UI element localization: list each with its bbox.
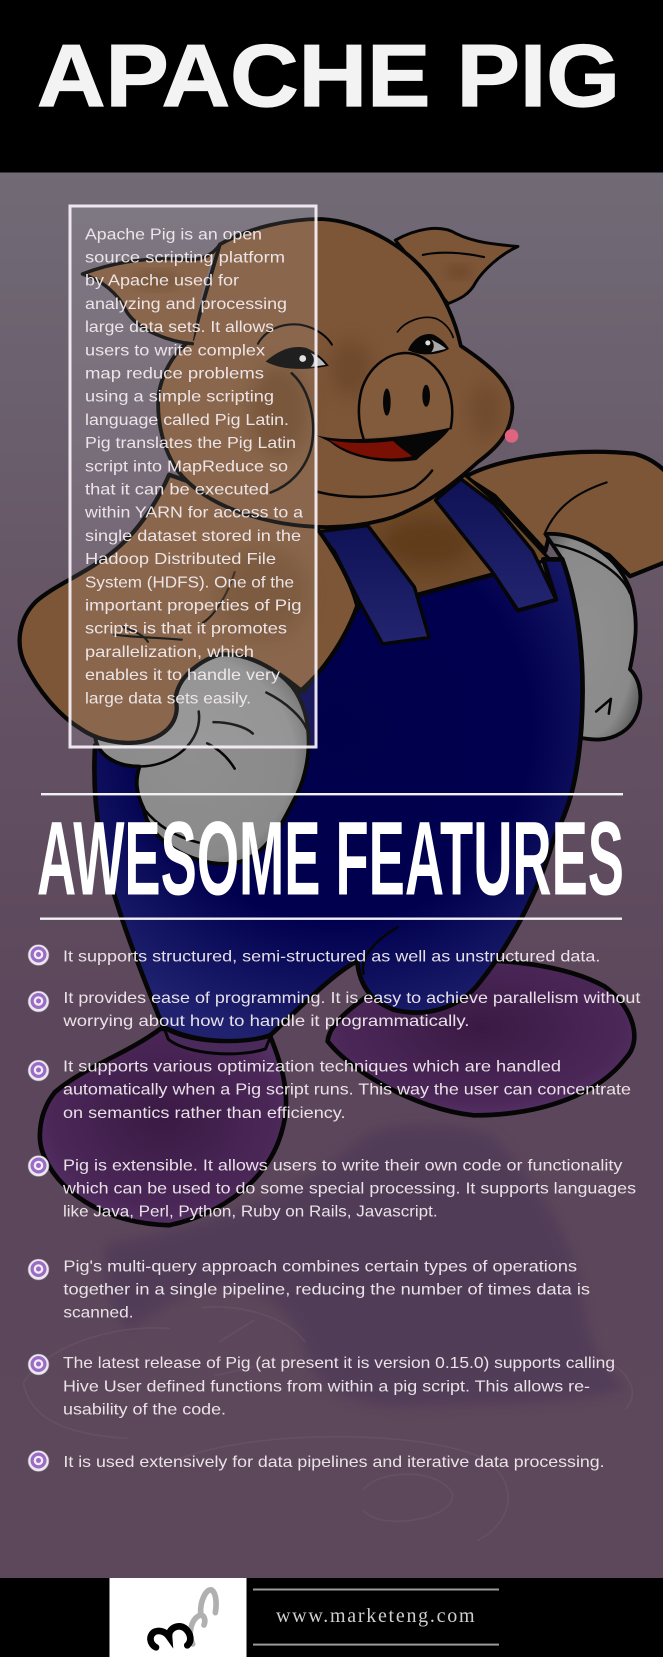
intro paragraph: Hadoop Distributed File xyxy=(85,551,276,568)
intro paragraph: analyzing and processing xyxy=(85,296,287,313)
intro paragraph: source scripting platform xyxy=(85,250,285,266)
feature 3 xyxy=(28,1058,631,1122)
feature 3: automatically when a Pig script runs. This way the user can concentrate xyxy=(63,1082,631,1099)
title: APACHE PIG xyxy=(37,26,620,125)
right strap xyxy=(435,479,556,610)
footer rules xyxy=(253,1588,499,1590)
intro paragraph: large data sets easily. xyxy=(85,690,251,707)
left strap xyxy=(317,526,429,644)
feature list xyxy=(28,944,641,1472)
left ear outline xyxy=(82,244,220,344)
pig head xyxy=(82,219,512,527)
left sock xyxy=(164,1028,271,1054)
left eye xyxy=(258,324,332,369)
intro box frame xyxy=(70,206,316,747)
feature 5: Pig's multi-query approach combines certain types of operations xyxy=(63,1259,577,1276)
intro paragraph: enables it to handle very xyxy=(85,667,280,684)
chest shading xyxy=(381,517,474,568)
footer band xyxy=(0,1578,663,1657)
left arm xyxy=(20,475,357,743)
right eye xyxy=(397,317,453,354)
website address: www.marketeng.com xyxy=(276,1605,475,1627)
mouth xyxy=(315,427,451,462)
intro paragraph: that it can be executed xyxy=(85,482,269,498)
icon: bullet xyxy=(28,944,49,966)
right ear xyxy=(395,228,518,304)
icon: bullet xyxy=(28,991,49,1012)
feature 4: which can be used to do some special processing. It supports languages xyxy=(62,1180,636,1197)
intro paragraph: using a simple scripting xyxy=(85,389,274,406)
intro paragraph: users to write complex xyxy=(85,342,265,359)
intro paragraph xyxy=(84,226,303,707)
feature 5: together in a single pipeline, reducing the number of times data is xyxy=(63,1282,590,1299)
left glove xyxy=(95,654,309,864)
icon: bullet xyxy=(28,1450,49,1472)
feature 3: on semantics rather than efficiency. xyxy=(63,1105,346,1122)
intro paragraph: large data sets. It allows xyxy=(85,319,274,336)
intro paragraph: scripts is that it promotes xyxy=(85,621,287,638)
icon: bullet xyxy=(28,1060,49,1081)
logo mark xyxy=(150,1590,216,1647)
intro paragraph: System (HDFS). One of the xyxy=(85,574,294,591)
left ear shading xyxy=(131,271,182,290)
feature 2: worrying about how to handle it programmatically. xyxy=(62,1013,469,1030)
feature 2: It provides ease of programming. It is easy to achieve parallelism without xyxy=(63,990,641,1007)
blue overalls xyxy=(94,559,583,1041)
intro paragraph: map reduce problems xyxy=(85,366,264,382)
intro paragraph: script into MapReduce so xyxy=(85,458,288,475)
intro paragraph: by Apache used for xyxy=(85,273,240,290)
snout xyxy=(359,353,452,439)
intro paragraph: Apache Pig is an open xyxy=(85,226,262,243)
cheek and chin lines xyxy=(271,373,432,497)
feature 7 xyxy=(28,1450,605,1472)
icon: bullet xyxy=(28,1259,49,1280)
right glove xyxy=(545,534,640,740)
feature 6: Hive User defined functions from within a pig script. This allows re- xyxy=(63,1378,590,1395)
icon: bullet xyxy=(28,1354,49,1375)
intro paragraph: language called Pig Latin. xyxy=(85,412,289,429)
feature 4: like Java, Perl, Python, Ruby on Rails, Javascript. xyxy=(63,1204,438,1220)
logo panel xyxy=(110,1578,246,1657)
feature 6: The latest release of Pig (at present it is version 0.15.0) supports calling xyxy=(63,1355,615,1372)
feature 7: It is used extensively for data pipelines and iterative data processing. xyxy=(63,1454,605,1471)
feature 4: Pig is extensible. It allows users to write their own code or functionality xyxy=(63,1157,622,1174)
icon: bullet xyxy=(28,1156,49,1176)
feature 5: scanned. xyxy=(63,1305,134,1322)
intro paragraph: single dataset stored in the xyxy=(85,528,301,545)
feature 3: It supports various optimization techniques which are handled xyxy=(63,1058,561,1075)
left ear xyxy=(82,244,220,344)
intro text box xyxy=(70,206,316,747)
feature 1: It supports structured, semi-structured as well as unstructured data. xyxy=(63,948,600,965)
left shoe xyxy=(40,1029,286,1225)
trouser crease xyxy=(363,927,397,974)
face shading xyxy=(330,340,372,399)
right arm crease xyxy=(545,482,607,532)
feature 4 xyxy=(28,1156,636,1220)
intro paragraph: parallelization, which xyxy=(85,644,254,661)
right arm xyxy=(465,452,663,576)
feature 6 xyxy=(28,1354,615,1418)
intro paragraph: within YARN for access to a xyxy=(84,505,303,522)
feature 6: usability of the code. xyxy=(63,1401,226,1418)
header band xyxy=(0,0,663,172)
feature 1 xyxy=(28,944,600,966)
intro paragraph: Pig translates the Pig Latin xyxy=(85,435,296,452)
feature 2 xyxy=(28,990,641,1030)
arm shading xyxy=(216,547,309,640)
pink dot xyxy=(505,429,518,443)
right shoe xyxy=(328,957,634,1115)
faint pig reflection xyxy=(23,1125,632,1540)
pig mascot illustration xyxy=(20,219,663,1540)
feature 5 xyxy=(28,1259,590,1322)
intro paragraph: important properties of Pig xyxy=(85,598,302,614)
chest xyxy=(313,475,550,606)
